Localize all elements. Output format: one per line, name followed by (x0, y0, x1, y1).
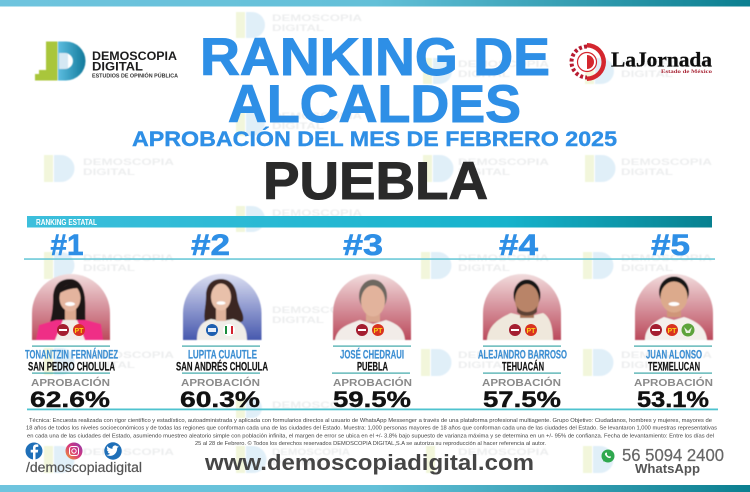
text: DIGITAL (83, 167, 136, 177)
text: DEMOSCOPIA (83, 447, 175, 457)
text: DEMOSCOPIA (458, 59, 550, 69)
logo wordmark: ESTUDIOS DE OPINIÓN PÚBLICA (92, 72, 178, 80)
logo wordmark (92, 49, 178, 80)
text: DEMOSCOPIA (621, 59, 713, 69)
party badges: PT (374, 328, 383, 335)
text: DEMOSCOPIA (83, 157, 175, 167)
party badges: PT (668, 328, 677, 335)
municipality: PUEBLA (357, 362, 388, 374)
methodology note: Técnica: Encuesta realizada con rigor científico y estadístico, autoadministrada y aplicada con formularios directos al usuario de WhatsApp Messenger a través de una plataforma profesional multiagente. Grupo Objetivo: Ciudadanos, hombres y mujeres, mayores de (29, 418, 712, 424)
text: DIGITAL (272, 457, 325, 467)
section bar: Ranking estatal (27, 216, 712, 228)
photo: José Chedraui (333, 274, 411, 340)
methodology note: 25 al 28 de Febrero. © Todos los derechos reservados DEMOSCOPIA DIGITAL,S.A se autoriza su reproducción al hacer referencia al autor. (195, 440, 546, 447)
approval value: 57.5% (483, 387, 561, 412)
text: DIGITAL (83, 360, 136, 370)
text: DEMOSCOPIA (272, 111, 363, 121)
candidate 2 (176, 274, 268, 412)
top color band (0, 0, 750, 6)
text: DEMOSCOPIA (83, 253, 175, 263)
section bar: Ranking estatal: RANKING ESTATAL (36, 218, 97, 227)
methodology note (26, 418, 717, 447)
whatsapp contact (602, 445, 724, 476)
heading: Puebla: PUEBLA (263, 152, 488, 211)
approval value: 60.3% (180, 387, 260, 412)
text: DIGITAL (458, 69, 511, 79)
name: JOSÉ CHEDRAUI (340, 348, 404, 362)
candidate 3 (332, 274, 412, 412)
whatsapp label: WhatsApp (635, 461, 700, 476)
name: TONANTZIN FERNÁNDEZ (25, 348, 118, 362)
candidate 1 (25, 274, 118, 412)
rank numbers: #5 (651, 229, 690, 262)
text: DIGITAL (272, 23, 325, 33)
subtitle: APROBACIÓN DEL MES DE FEBRERO 2025 (132, 126, 617, 151)
approval label: APROBACIÓN (181, 376, 260, 389)
methodology note: en cada una de las ciudades del Estado, asumiendo muestreo aleatorio simple con población infinita, el margen de error se ubica en el +/- 3.8% bajo supuesto de varianza máxima y se determina en un +/- 95% de confianza. Fecha de levantamiento: Entre los días del (27, 434, 714, 440)
name: JUAN ALONSO (646, 350, 702, 362)
text: DEMOSCOPIA (621, 350, 713, 360)
party badges: PT (75, 328, 84, 335)
phone number: 56 5094 2400 (622, 445, 724, 465)
icon: Facebook (26, 442, 42, 460)
text: DIGITAL (272, 315, 325, 325)
text: DEMOSCOPIA (272, 13, 363, 23)
rank numbers: #3 (343, 229, 383, 262)
text: DIGITAL (272, 121, 325, 131)
municipality: TEXMELUCAN (648, 362, 700, 374)
text: DEMOSCOPIA (272, 400, 363, 410)
text: DEMOSCOPIA (458, 157, 550, 167)
text: DEMOSCOPIA (458, 447, 550, 457)
logo: La Jornada (572, 43, 712, 81)
party badges: PT (527, 328, 536, 335)
icon: La Jornada sun (572, 43, 606, 81)
bottom color band (0, 485, 750, 492)
text: DIGITAL (458, 167, 511, 177)
title: RANKING DE (200, 28, 550, 87)
title: ALCALDES (228, 75, 521, 134)
social handle: /demoscopiadigital (26, 460, 142, 475)
text: DIGITAL (621, 69, 674, 79)
text: DEMOSCOPIA (458, 253, 550, 263)
approval value: 62.6% (30, 387, 110, 412)
logo wordmark: DIGITAL (92, 60, 143, 74)
icon: Twitter (104, 442, 122, 460)
approval label: APROBACIÓN (634, 376, 713, 389)
text: DEMOSCOPIA (272, 447, 351, 457)
municipality: SAN ANDRÉS CHOLULA (176, 360, 268, 374)
icon: WhatsApp (602, 450, 614, 462)
rule (32, 346, 110, 347)
rank numbers (50, 229, 690, 262)
icon: Demoscopia D mark (35, 42, 86, 80)
photo: Tonantzin Fernández (32, 274, 110, 340)
municipality: SAN PEDRO CHOLULA (28, 362, 115, 374)
text: DIGITAL (458, 263, 511, 273)
approval label: APROBACIÓN (482, 376, 561, 389)
social media (26, 442, 142, 475)
icon: Instagram (66, 442, 82, 460)
text: DEMOSCOPIA (621, 253, 713, 263)
photo: Alejandro Barroso (483, 274, 561, 340)
text: DIGITAL (83, 263, 136, 273)
photo: Lupita Cuautle (183, 274, 262, 340)
rank numbers: #1 (50, 229, 84, 262)
rank numbers: #2 (191, 229, 230, 262)
text: DIGITAL (458, 360, 511, 370)
name: LUPITA CUAUTLE (188, 350, 257, 362)
approval label: APROBACIÓN (333, 376, 412, 389)
municipality: TEHUACÁN (502, 360, 544, 374)
logo: La Jornada: Estado de México (661, 69, 712, 75)
name: ALEJANDRO BARROSO (478, 350, 567, 362)
text: DEMOSCOPIA (458, 350, 550, 360)
La Jornada wordmark: LaJornada (611, 48, 712, 72)
approval value: 59.5% (333, 387, 411, 412)
text: DEMOSCOPIA (272, 305, 363, 315)
title (200, 28, 550, 134)
text: DEMOSCOPIA (272, 208, 363, 218)
approval label: APROBACIÓN (31, 376, 110, 389)
text: DIGITAL (621, 263, 674, 273)
text: DIGITAL (621, 360, 674, 370)
candidate 4 (478, 274, 567, 412)
text: DEMOSCOPIA (83, 350, 175, 360)
text: DIGITAL (621, 167, 674, 177)
logo: Demoscopia Digital (35, 42, 178, 80)
website url: www.demoscopiadigital.com (204, 450, 534, 475)
candidate 5 (634, 274, 713, 412)
text: DEMOSCOPIA (621, 157, 713, 167)
approval value: 53.1% (637, 387, 709, 412)
rank numbers: #4 (499, 229, 538, 262)
photo: Juan Alonso (635, 274, 713, 340)
party badges (206, 324, 235, 336)
logo wordmark: DEMOSCOPIA (92, 49, 177, 63)
methodology note: 18 años de todos los niveles socioeconómicos y de todas las regiones que conforman cada una de las ciudades del Estado. Muestra: 1,000 personas mayores de 18 años que conforman cada una de las ciudades del Estado. Se levantaron 1,000 muestras representativas (26, 426, 717, 432)
